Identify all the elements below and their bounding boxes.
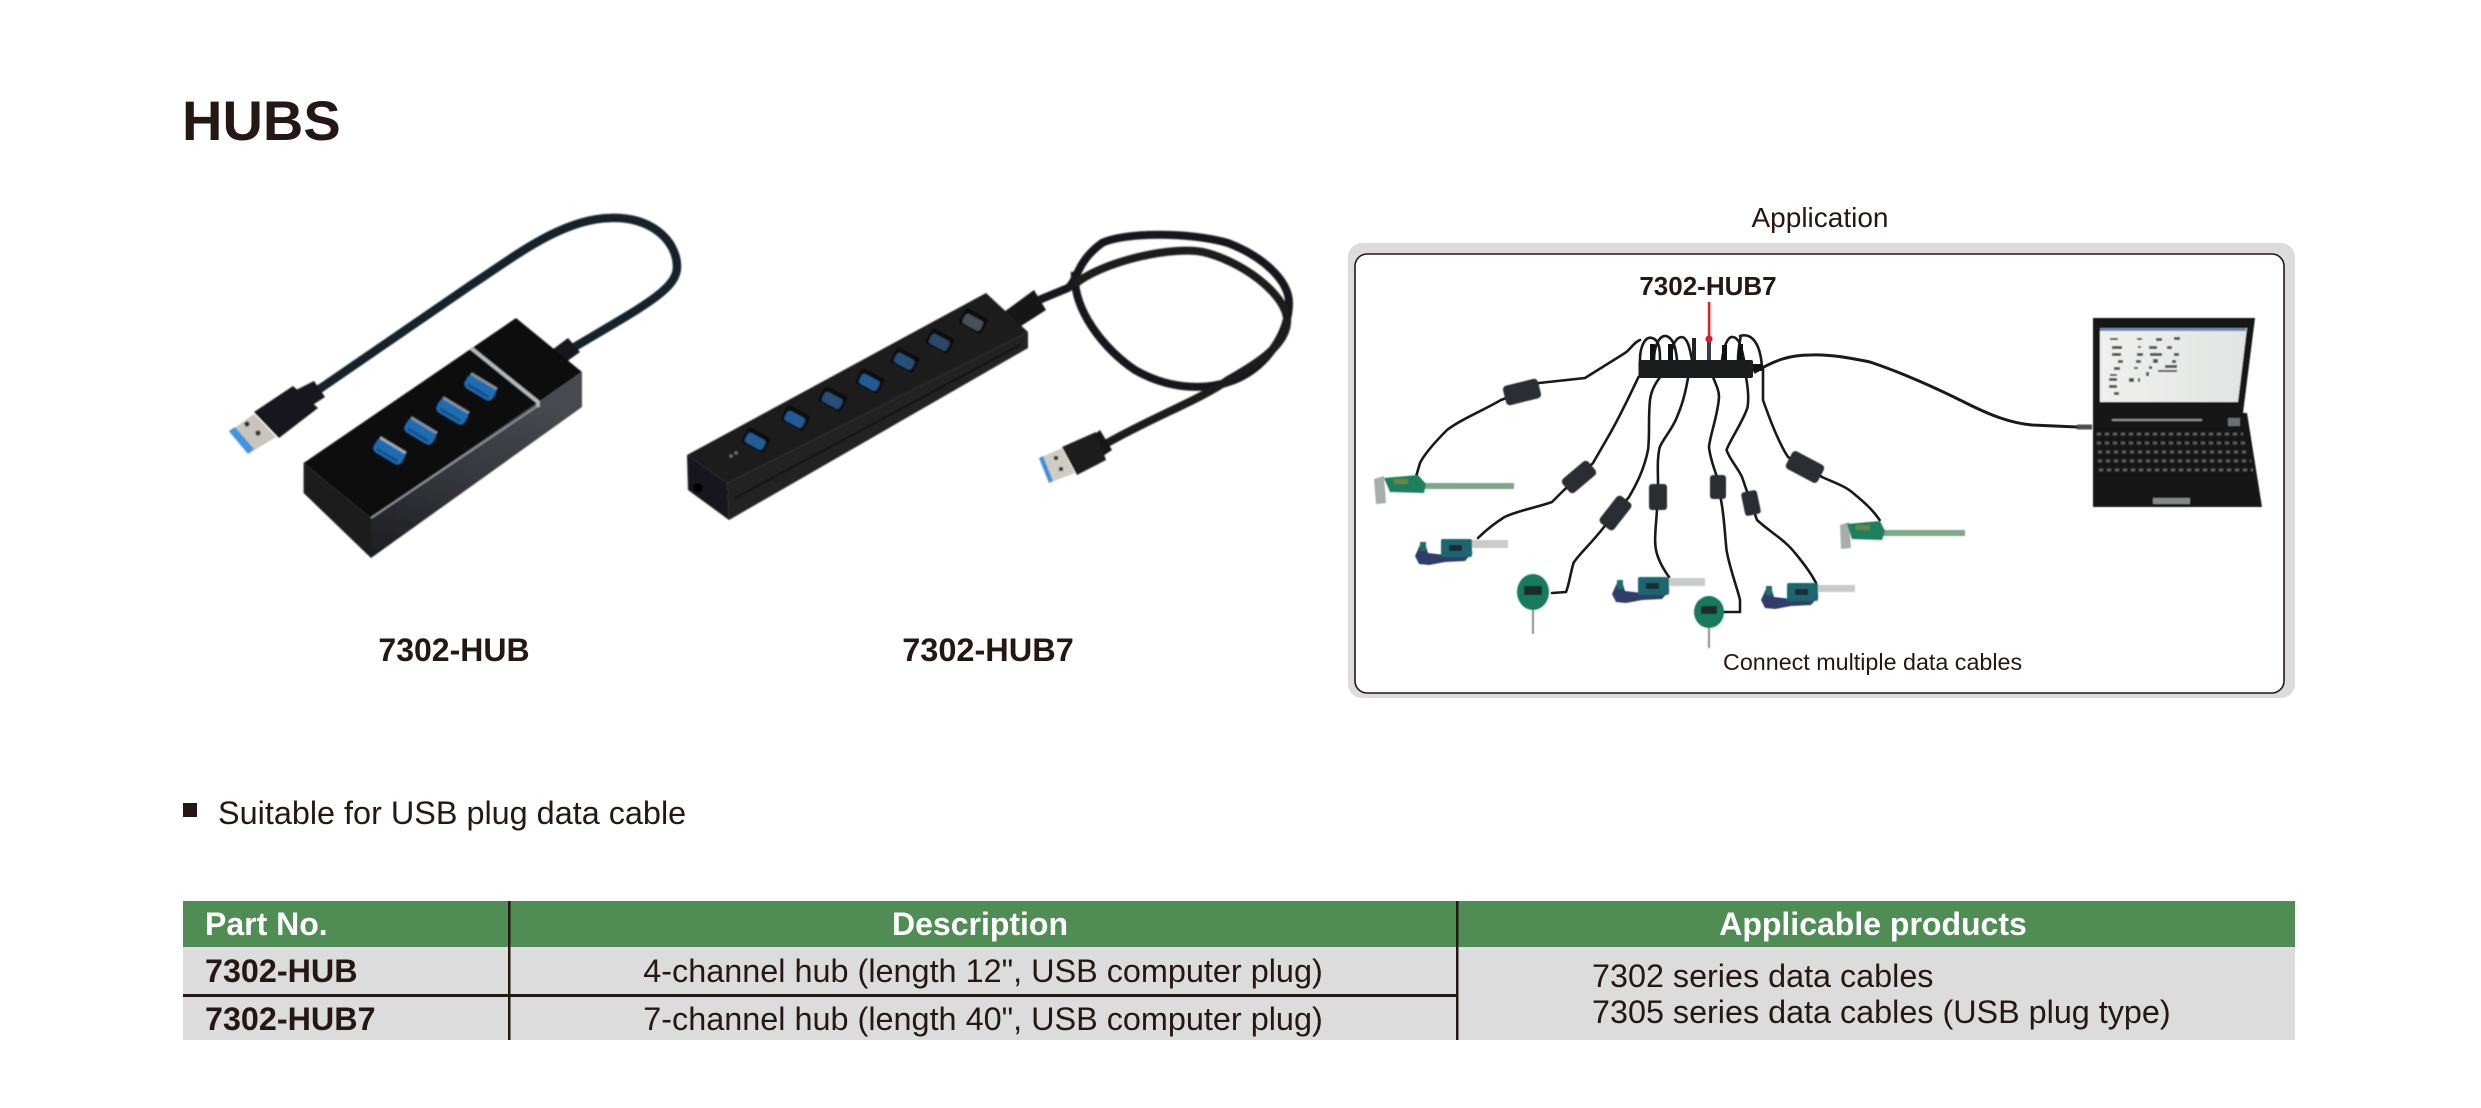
data cables bbox=[1416, 335, 2077, 612]
bullet: feature note: Suitable for USB plug data cable bbox=[218, 795, 686, 831]
caption: Connect multiple data cables: Connect multiple data cables bbox=[1723, 649, 2022, 675]
icon: caliper left bbox=[1374, 475, 1514, 504]
label: 7302-HUB7: 7302-HUB7 bbox=[902, 632, 1074, 668]
table row: 7302-HUB: 7302-HUB bbox=[205, 953, 358, 989]
product photo: 7302-HUB7 bbox=[687, 235, 1289, 520]
table row: 7302-HUB: 4-channel hub (length 12", USB computer plug) bbox=[643, 953, 1323, 989]
table row: 7302-HUB7: 7-channel hub (length 40", USB computer plug) bbox=[643, 1001, 1323, 1037]
table: part numbers bbox=[183, 901, 2295, 1040]
table row: 7302-HUB bbox=[205, 953, 1323, 989]
table cell: applicable products: 7302 series data cables bbox=[1592, 958, 1933, 994]
title: HUBS bbox=[182, 89, 341, 152]
arrow: red pointer to hub bbox=[1705, 302, 1713, 343]
table header row: Description bbox=[892, 906, 1068, 942]
table header row: Applicable products bbox=[1719, 906, 2027, 942]
table row: 7302-HUB7: 7302-HUB7 bbox=[205, 1001, 376, 1037]
product photo: 7302-HUB bbox=[229, 218, 677, 558]
table cell: applicable products: 7305 series data cables (USB plug type) bbox=[1592, 994, 2171, 1030]
icon: dial indicator 2 bbox=[1694, 596, 1724, 648]
table cell: applicable products bbox=[1592, 958, 2171, 1030]
icon: laptop bbox=[2077, 318, 2262, 507]
label: 7302-HUB: 7302-HUB bbox=[378, 632, 530, 668]
icon: caliper right bbox=[1840, 521, 1965, 549]
table header row bbox=[183, 901, 2295, 947]
table row: 7302-HUB7 bbox=[205, 1001, 1323, 1037]
icon: dial indicator 1 bbox=[1517, 574, 1549, 634]
table header row: Part No. bbox=[205, 906, 328, 942]
label: 7302-HUB7 callout: 7302-HUB7 bbox=[1639, 271, 1777, 301]
panel: application diagram bbox=[1348, 243, 2295, 698]
heading: Application: Application bbox=[1752, 202, 1888, 233]
icon: micrometer 1 bbox=[1415, 539, 1508, 565]
ferrite boxes on cables bbox=[1502, 378, 1826, 532]
icon: micrometer 3 bbox=[1761, 583, 1855, 609]
icon: micrometer 2 bbox=[1612, 577, 1705, 603]
hub on application diagram bbox=[1638, 338, 1762, 378]
